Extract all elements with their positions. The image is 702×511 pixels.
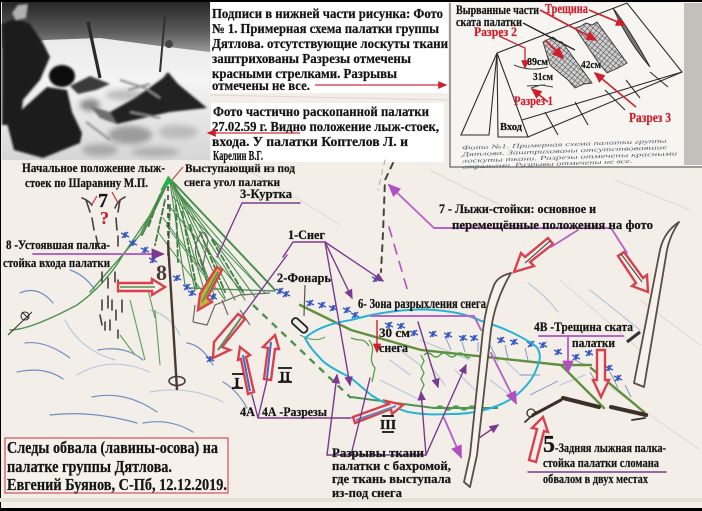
ridge line olive [300,305,644,412]
label: cuts: 4А [240,405,255,419]
dashed skis upper middle [378,160,408,292]
snow surface strokes [17,270,640,432]
tent schema panel: 31см [533,72,553,83]
big ski left [464,273,511,487]
pointer lines [33,167,666,472]
left compass mark [8,312,32,335]
schema labels: Вырванные части [456,2,539,17]
caption panel top: Дятлова. отсутствующие лоскуты ткани [212,36,448,51]
label: rear pole [543,432,666,486]
label: rear pole: обвалом в двух местах [543,471,648,486]
label: tears: из-под снега [332,486,403,500]
ski pole left [88,22,100,78]
label: snow depth: снега [379,341,409,355]
label: rear pole: -Задняя лыжная палка- [555,440,666,455]
arrow cut A [213,314,245,358]
crack slit [613,8,650,67]
roman numeral marks: II [280,370,290,385]
handwritten schema caption [460,138,677,171]
labels on the sketch [3,161,666,500]
title box: палатке группы Дятлова. [7,457,172,476]
roman numeral marks: III [380,418,396,433]
tent schema panel: Разрез 3 [629,110,671,125]
schema pointer arrows [499,10,636,107]
caption panel photo: входа. У палатки Коптелов Л. и [212,134,408,149]
arrow to photo [208,132,300,134]
arrow ski right [618,252,648,292]
broken rear ski pole [525,398,646,422]
label: cuts: 4А -Разрезы [262,405,327,419]
tent schema panel: Разрез 1 [514,94,553,108]
title box: Евгений Буянов, С-Пб, 12.12.2019. [7,475,227,494]
photo: partly excavated tent [2,2,210,160]
label: jacket: 3-Куртка [240,186,292,201]
label: ski positions [439,201,653,232]
blue star marks [121,232,622,381]
label: snow depth: 30 см [379,326,411,340]
label: initial ski position: Начальное положение лыж- [22,161,165,175]
label: flashlight: 2-Фонарь [277,271,331,285]
label: rear pole: стойка палатки сломана [543,455,659,470]
flashlight [291,285,309,334]
arrow ski left [514,238,553,272]
caption panel photo: Карелин В.Г. [213,148,263,163]
roman numeral marks: I [234,376,240,391]
arrow cut II [263,335,279,380]
long green curve [10,215,150,330]
dashed lower edge [253,305,351,398]
tent outline [461,3,682,137]
tent slope sketch in green [10,176,644,412]
tent schema panel [450,1,702,171]
caption panel photo: 27.02.59 г. Видно положение лыж-стоек, [212,119,439,134]
handwritten schema caption: стрелками. Разрывы отмечены не все. [462,159,632,171]
caption panel top: красными стрелками. Разрывы [212,66,397,81]
ski pole 8 [156,242,185,390]
label: initial ski position: стоек по Шаравину М.П. [25,176,148,190]
marker 7 and question [98,190,109,228]
arrow to pole 8 [118,279,165,295]
label: snow: 1-Снег [288,227,325,242]
roman numeral marks [232,368,396,433]
arrow rear pole [529,417,548,462]
caption panel photo [208,103,444,163]
tent schema panel: 89см [527,57,548,68]
label: entry pole: стойка входа палатки [3,255,110,270]
dark dashes of ski poles, left [82,197,125,338]
tent schema panel: ската палатки [456,14,522,29]
tent schema panel: 42см [581,60,601,71]
label: tears: Разрывы ткани [332,446,424,460]
marker 7 and question: ? [100,208,109,228]
torn edges wavy [351,338,484,410]
arrow jacket [198,267,222,310]
arrow cut I [238,347,254,394]
label: slope crack [534,319,633,350]
label: snow depth [379,326,411,355]
handwritten schema caption: лоскуты ткани. Разрезы отмечены красными [460,151,677,165]
arrow crack [593,350,609,397]
ski pole 8: 8 [156,260,167,285]
tent schema panel: Трещина [545,1,588,16]
handwritten schema caption: Фото №1. Примерная схема палатки группы [462,139,667,152]
caption panel top: Подписи в нижней части рисунка: Фото [212,6,443,21]
caption panel top [211,2,448,93]
label: tent corner [184,161,295,189]
tent schema panel: Разрез 2 [474,25,517,39]
ski pole right [160,15,165,72]
label: tears: где ткань выступала [332,472,452,486]
label: tears [332,446,452,500]
big ski right [634,222,679,387]
caption panel photo: Фото частично раскопанной палатки [213,104,429,119]
marker 7 and question: 7 [98,190,108,212]
bright tent corner [160,176,173,191]
handwritten schema caption: Дятлова. Заштрихованы отсутствовавшие [460,145,668,158]
arrow cut III [353,401,403,423]
arrow to schema [315,84,446,86]
cyan loosening zone outline [305,309,540,414]
label: rear pole: 5 [543,432,555,458]
label: tent corner: снега угол палатки [184,175,280,189]
label: initial ski position [22,161,165,190]
label: entry pole [3,237,110,270]
red hollow arrows [118,238,648,462]
label: loosening zone: 6- Зона разрыхления снега [358,296,486,311]
label: ski positions: 7 - Лыжи-стойки: основное и [439,201,596,216]
label: slope crack: палатки [572,335,615,350]
small cuts [514,65,553,88]
title box: Следы обвала (лавины-осова) на [7,438,218,457]
label: ski positions: перемещённые положения на фото [452,217,653,232]
caption panel top: заштрихованы Разрезы отмечены [212,51,411,66]
paper creases [0,95,702,500]
caption panel top: № 1. Примерная схема палатки группы [212,21,439,36]
title box [5,438,228,494]
label: tent corner: Выступающий из под [185,161,295,175]
label: slope crack: 4В -Трещина ската [534,319,633,334]
jacket scribble [193,232,270,325]
torn cloth patches [543,22,627,88]
label: entry pole: 8 -Устоявшая палка- [6,237,110,252]
tent schema panel: Вход [500,122,523,133]
label: tears: палатки с бахромой, [332,459,451,473]
caption panel top: отмечены не все. [212,78,310,93]
